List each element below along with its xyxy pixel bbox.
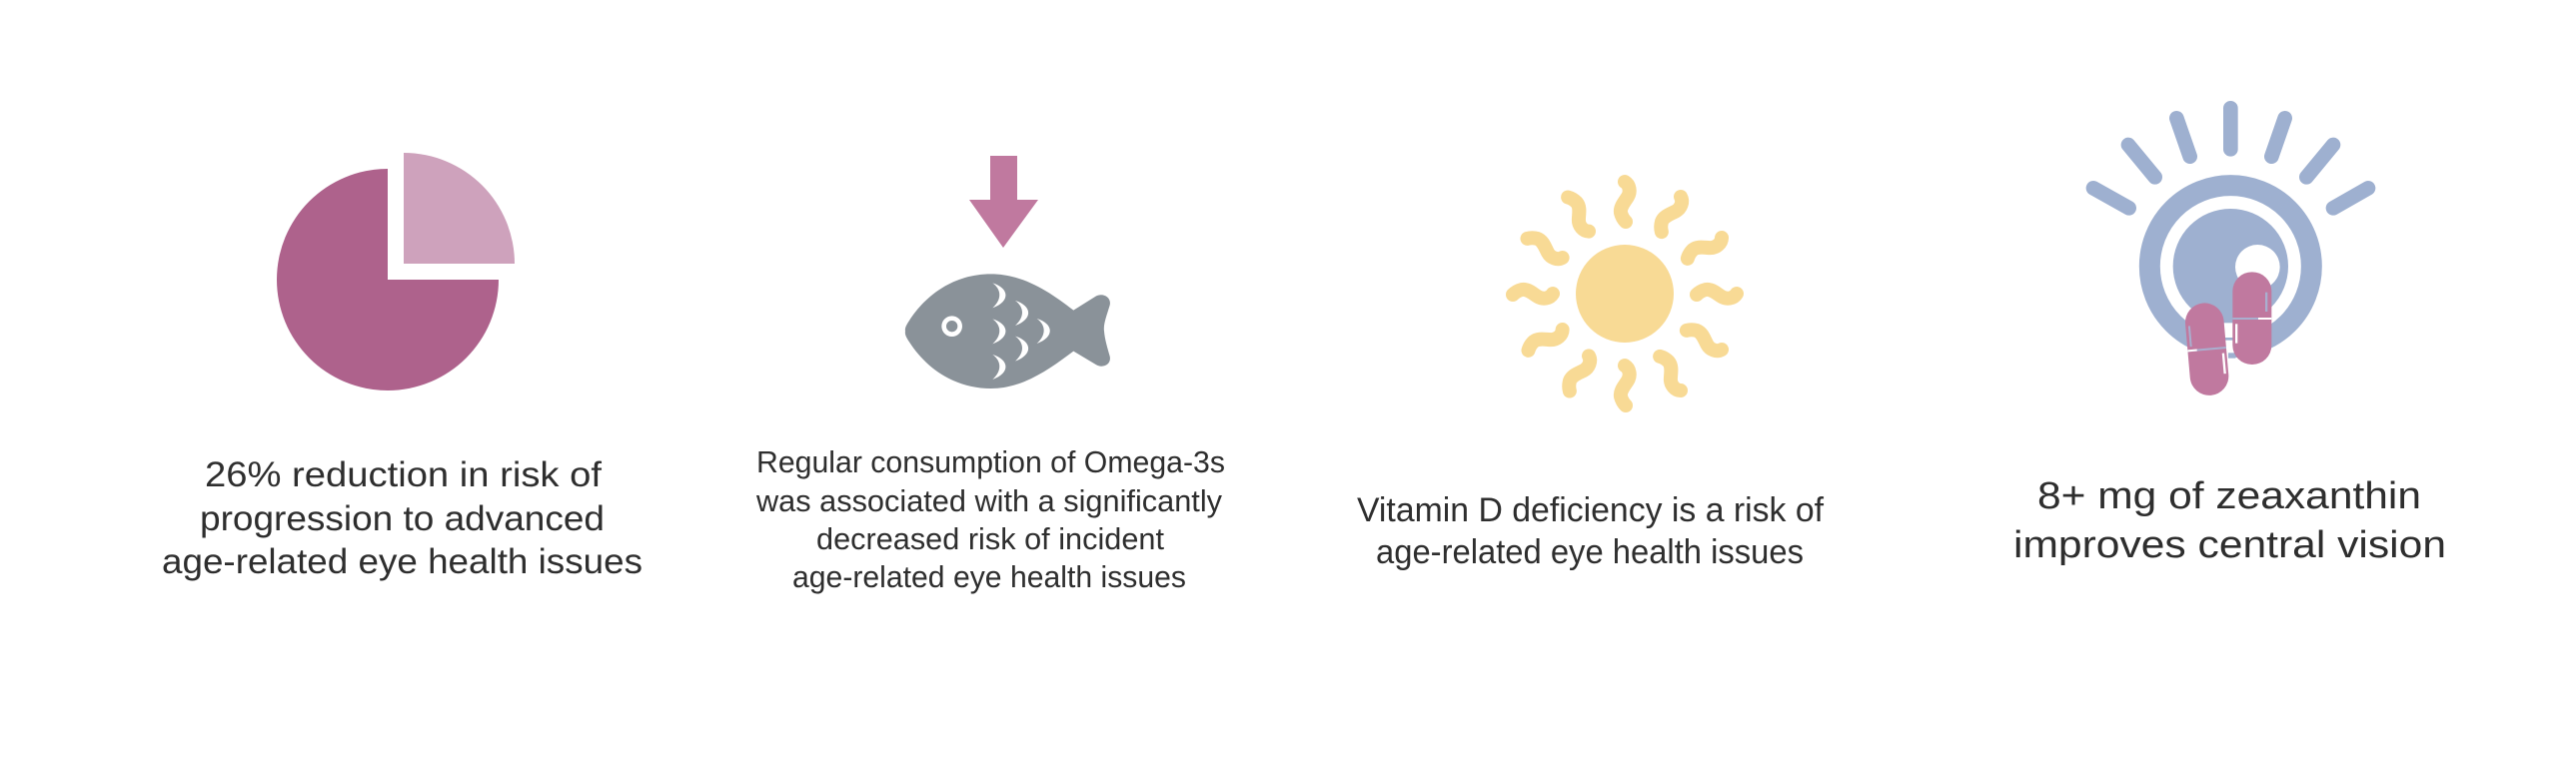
caption: 26% reduction: 26% reduction in risk of [205,455,602,494]
icon: sun [1513,182,1737,405]
caption: Omega-3s: Regular consumption of Omega-3s [756,444,1225,479]
caption: 26% reduction: age-related eye health issues [162,542,643,581]
caption: Vitamin D: age-related eye health issues [1376,533,1804,571]
caption: Vitamin D: Vitamin D deficiency is a risk of [1357,491,1825,529]
panel: 26% reduction [162,153,643,581]
caption: Omega-3s [755,444,1225,594]
caption: 26% reduction: progression to advanced [200,499,605,538]
icon: eye with pills [2093,108,2368,397]
panel: zeaxanthin [2013,108,2446,566]
caption: zeaxanthin: 8+ mg of zeaxanthin [2037,475,2421,517]
caption: 26% reduction [162,455,643,581]
caption: Omega-3s: was associated with a significantly [755,483,1222,518]
caption: zeaxanthin [2013,475,2446,566]
panel: Omega-3s [755,156,1225,594]
caption: Vitamin D [1357,491,1825,571]
caption: zeaxanthin: improves central vision [2013,524,2446,566]
icon: pie chart [277,153,515,390]
icon: down arrow [969,156,1038,248]
caption: Omega-3s: decreased risk of incident [816,521,1164,556]
panel: Vitamin D [1357,182,1825,571]
caption: Omega-3s: age-related eye health issues [792,559,1186,594]
icon: fish [905,274,1110,388]
